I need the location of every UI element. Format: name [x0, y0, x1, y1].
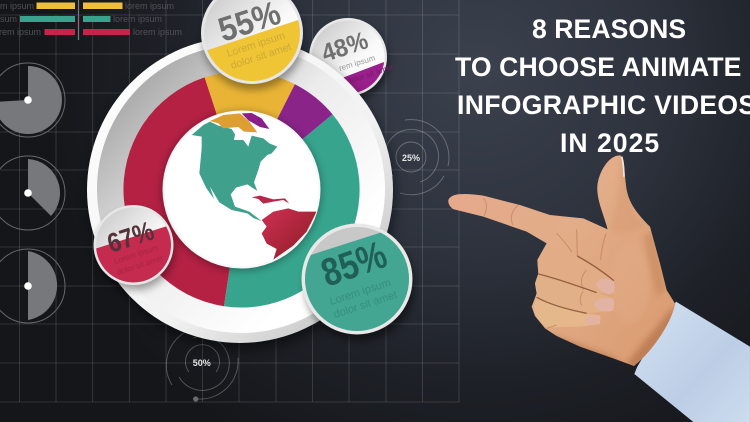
bubble: 48%: dolor sit amet	[346, 62, 395, 86]
finger separators	[537, 256, 614, 313]
bar: red right	[83, 29, 130, 35]
bubble: 48%: rem ipsum	[338, 53, 377, 73]
radial dial: 50%: 50%	[193, 358, 211, 368]
globe	[162, 110, 322, 271]
legend labels: lorem ipsum	[125, 1, 174, 11]
ring segment: teal	[224, 114, 360, 308]
continent: North America	[192, 122, 277, 221]
pie gauge: bottom	[0, 249, 65, 323]
bubble: 48%	[309, 18, 394, 100]
finger: little	[534, 298, 601, 327]
title: INFOGRAPHIC VIDEOS	[457, 90, 750, 120]
finger nails	[585, 279, 615, 325]
bubble: 67%: dolor sit amet	[116, 253, 165, 277]
main donut disc	[87, 37, 395, 349]
bubble: 55%: Lorem ipsum	[225, 30, 287, 60]
finger: ring	[535, 275, 614, 313]
bubble: 55%	[198, 0, 307, 94]
bubble: 67%: Lorem ipsum	[113, 243, 160, 266]
bubble: 48%: 48%	[318, 27, 372, 68]
bubble: 85%	[300, 224, 418, 342]
ring segment: red	[123, 77, 230, 306]
bar: yellow left	[36, 2, 75, 9]
bar: yellow right	[83, 2, 122, 9]
thumb highlight	[622, 157, 624, 177]
region: Caribbean	[252, 196, 289, 204]
hand shading	[534, 157, 680, 377]
shirt cuff	[634, 302, 750, 422]
legend labels: lorem ipsum	[133, 27, 182, 37]
finger: middle	[538, 244, 546, 274]
legend bars	[0, 0, 182, 40]
background grid	[0, 0, 459, 402]
ring segment: purple	[277, 84, 333, 140]
bar: red left	[44, 29, 75, 35]
bar: teal right	[83, 16, 110, 22]
title	[455, 14, 750, 158]
hand outline	[448, 155, 675, 366]
bubble: 85%: 85%	[316, 233, 392, 296]
region: Greenland	[242, 113, 269, 129]
pie gauge: top	[0, 63, 65, 137]
pointing hand	[448, 155, 750, 422]
bubble: 67%: 67%	[104, 216, 158, 259]
bubble: 55%: dolor sit amet	[229, 41, 293, 72]
legend labels	[0, 1, 182, 37]
disc face	[97, 45, 385, 333]
bubble: 85%: Lorem ipsum	[328, 277, 392, 308]
continent: South America	[262, 208, 317, 260]
knuckle and palm creases	[483, 198, 606, 328]
pie gauge: middle	[0, 156, 65, 230]
radial dial: 50%	[166, 327, 238, 402]
radial dial: 25%: 25%	[402, 153, 420, 163]
region: Arctic Canada	[210, 113, 257, 132]
disc rim	[87, 37, 393, 343]
title: 8 REASONS	[532, 14, 686, 44]
legend labels: lorem ipsum	[113, 14, 162, 24]
title: TO CHOOSE ANIMATE	[455, 52, 742, 82]
ring segment: yellow	[205, 71, 295, 120]
radial dial: 25%	[385, 120, 449, 195]
bar: teal left	[20, 16, 75, 22]
bubble: 85%: dolor sit amet	[332, 289, 399, 321]
bubble: 67%	[94, 205, 179, 295]
title: IN 2025	[560, 128, 660, 158]
